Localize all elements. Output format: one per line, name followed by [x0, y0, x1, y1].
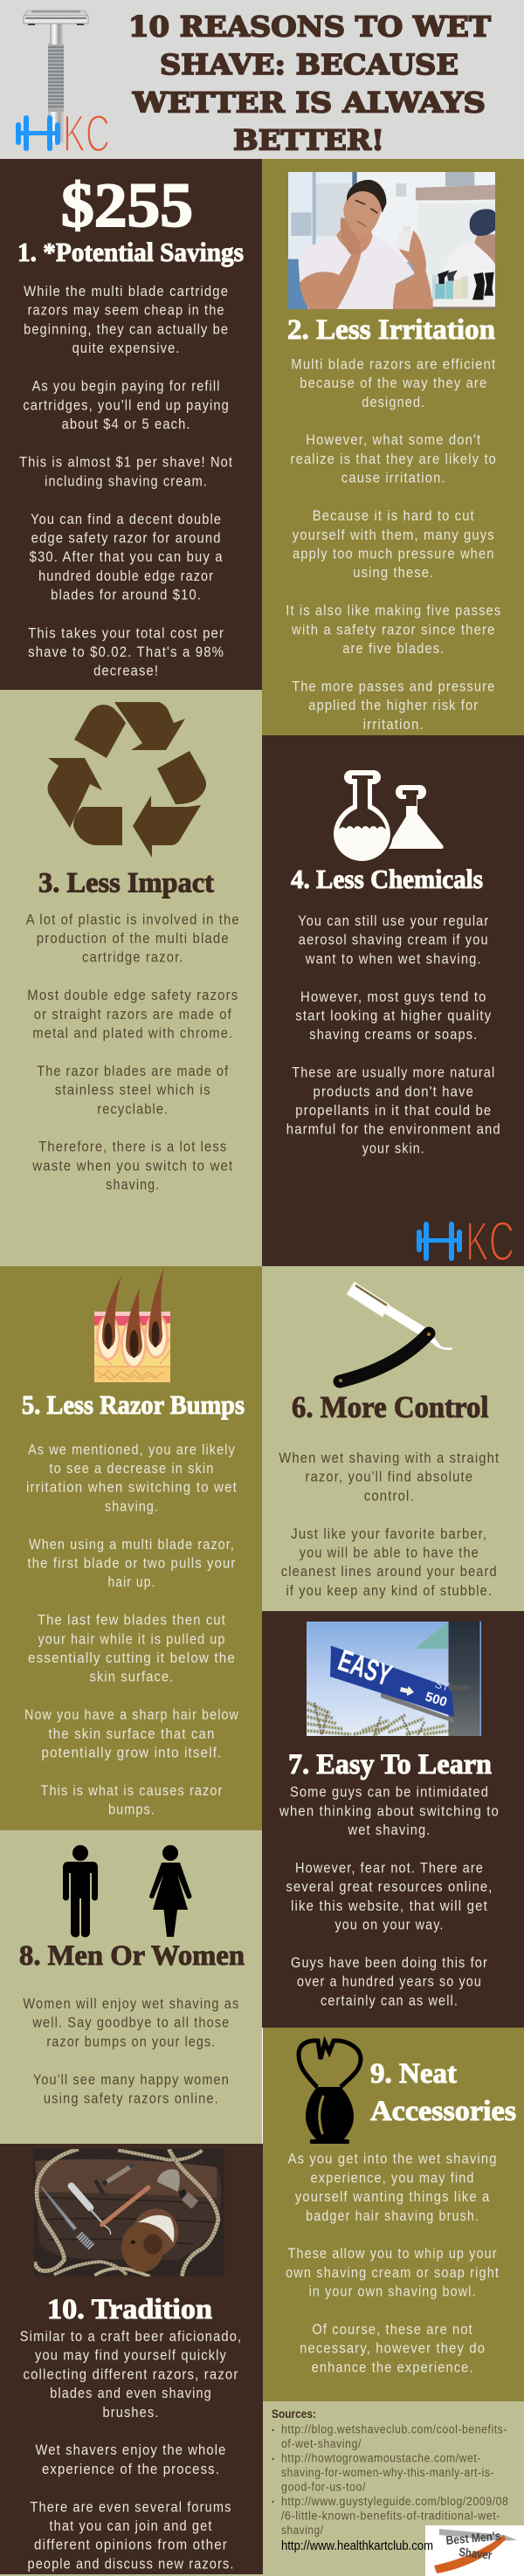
- big number: $255: $255: [61, 170, 193, 240]
- body text: control: When wet shaving with a straight: [279, 1450, 500, 1466]
- body text: tradition: that you can join and get: [49, 2517, 213, 2534]
- photo: shaving tools on wood: [34, 2149, 224, 2276]
- body text: tradition: brushes.: [103, 2404, 159, 2421]
- body text: easy: you on your way.: [335, 1917, 444, 1933]
- heading: 9: [370, 2058, 516, 2127]
- sources list: of-wet-shaving/: [281, 2437, 362, 2450]
- body text: razor bumps: essentially cutting it below the: [28, 1650, 236, 1666]
- title: 10 REASONS TO WET: [128, 10, 491, 44]
- body text: razor bumps: As we mentioned, you are likely: [28, 1441, 236, 1457]
- panel: 6 more control: [262, 1266, 524, 1611]
- body text: irritation: apply too much pressure when: [293, 545, 495, 562]
- icon: recycle symbol: [47, 702, 206, 858]
- body text: accessories: yourself wanting things like a: [295, 2188, 490, 2205]
- body text: chemicals: However, most guys tend to: [300, 988, 487, 1005]
- body text: irritation: Multi blade razors are efficient: [291, 355, 496, 372]
- body text: easy: Guys have been doing this for: [291, 1954, 488, 1971]
- body text: impact: recyclable.: [97, 1100, 169, 1117]
- body text: tradition: different opinions from other: [34, 2537, 228, 2553]
- body text: razor bumps: Now you have a sharp hair below: [24, 1706, 239, 1723]
- panel: 5 less razor bumps: [0, 1266, 262, 1830]
- body text: savings: As you begin paying for refill: [32, 378, 221, 395]
- body text: irritation: irritation.: [363, 716, 424, 733]
- body text: savings: While the multi blade cartridge: [24, 283, 229, 300]
- body text: accessories: enhance the experience.: [312, 2359, 474, 2375]
- icon: shaving brush: [299, 2041, 361, 2144]
- header panel: [0, 0, 524, 162]
- body text: impact: A lot of plastic is involved in the: [26, 911, 240, 927]
- heading: 9: Accessories: [370, 2096, 516, 2127]
- body text: irritation: However, what some don't: [306, 431, 481, 448]
- body text: easy: [279, 1784, 500, 2008]
- panel: 1 potential savings: [0, 159, 262, 690]
- panel: 4 less chemicals: [262, 735, 524, 1273]
- sources heading: Sources:: [272, 2407, 316, 2421]
- body text: chemicals: You can still use your regular: [298, 913, 489, 929]
- body text: accessories: Of course, these are not: [312, 2321, 473, 2338]
- photo: easy street sign: ST: [433, 1677, 451, 1694]
- badge: best men's shaver: Best Men's: [445, 2529, 501, 2547]
- title: [128, 10, 491, 157]
- body text: razor bumps: potentially grow into itself.: [42, 1745, 222, 1760]
- body text: women: using safety razors online.: [44, 2090, 219, 2106]
- photo: man with aftershave: [288, 172, 495, 310]
- body text: razor bumps: [24, 1441, 239, 1818]
- photo: easy street sign: [307, 1622, 481, 1736]
- body text: irritation: using these.: [353, 564, 434, 581]
- body text: tradition: blades and even shaving: [50, 2385, 212, 2401]
- panel: 9 neat accessories: [263, 2028, 524, 2401]
- body text: savings: including shaving cream.: [45, 472, 208, 489]
- body text: easy: certainly can as well.: [321, 1992, 458, 2008]
- sources list: shaving/: [281, 2524, 323, 2537]
- body text: savings: This takes your total cost per: [28, 624, 224, 641]
- body text: tradition: Similar to a craft beer aficionado,: [20, 2328, 242, 2345]
- website link: http://www.healthkartclub.com: [281, 2538, 433, 2553]
- icon: straight razor: [339, 1282, 452, 1382]
- body text: savings: You can find a decent double: [31, 511, 222, 527]
- body text: chemicals: These are usually more natural: [292, 1064, 495, 1081]
- body text: savings: about $4 or 5 each.: [62, 416, 191, 432]
- body text: control: you will be able to have the: [300, 1544, 479, 1561]
- sources list: good-for-us-too/: [281, 2481, 366, 2494]
- body text: savings: shave to $0.02. That's a 98%: [28, 644, 224, 660]
- panel: 2 less irritation: [262, 159, 524, 735]
- panel: 8 men or women: [0, 1830, 262, 2144]
- icon: safety razor: [24, 10, 88, 142]
- icon: flasks: [332, 770, 444, 864]
- photo: easy street sign: 500: [424, 1690, 449, 1710]
- body text: women: Women will enjoy wet shaving as: [23, 1995, 239, 2012]
- sources list: http://blog.wetshaveclub.com/cool-benefits-: [281, 2423, 507, 2436]
- body text: savings: hundred double edge razor: [38, 568, 214, 584]
- panel: 3 less impact: [0, 690, 262, 1266]
- body text: irritation: [286, 355, 501, 733]
- title: SHAVE: BECAUSE: [160, 48, 458, 81]
- body text: razor bumps: your hair while it is pulled up: [38, 1630, 225, 1647]
- body text: razor bumps: the first blade or two pulls your: [28, 1554, 236, 1572]
- body text: tradition: people and discuss new razors.: [28, 2555, 234, 2572]
- sources list: http://www.guystyleguide.com/blog/2009/08: [281, 2495, 508, 2508]
- body text: impact: [26, 911, 240, 1193]
- body text: irritation: applied the higher risk for: [308, 697, 479, 713]
- body text: razor bumps: skin surface.: [89, 1669, 175, 1685]
- panel: sources: [263, 2401, 524, 2576]
- body text: impact: The razor blades are made of: [37, 1063, 229, 1079]
- body text: razor bumps: shaving.: [105, 1498, 159, 1514]
- body text: razor bumps: irritation when switching to wet: [26, 1479, 238, 1496]
- body text: razor bumps: bumps.: [108, 1801, 155, 1818]
- body text: accessories: experience, you may find: [311, 2169, 475, 2186]
- sources list: http://howtogrowamoustache.com/wet-: [281, 2452, 481, 2465]
- body text: impact: cartridge razor.: [82, 949, 184, 966]
- body text: chemicals: shaving creams or soaps.: [309, 1026, 478, 1043]
- body text: control: Just like your favorite barber,: [291, 1526, 487, 1542]
- sources list: /6-little-known-benefits-of-traditional-wet-: [281, 2510, 500, 2523]
- logo: HKC: KC: [63, 105, 110, 162]
- body text: control: cleanest lines around your beard: [281, 1563, 498, 1580]
- body text: irritation: Because it is hard to cut: [313, 507, 475, 524]
- body text: tradition: collecting different razors, razor: [23, 2366, 239, 2382]
- body text: easy: when thinking about switching to: [279, 1802, 500, 1819]
- sources list: [272, 2423, 508, 2537]
- body text: chemicals: your skin.: [362, 1140, 425, 1156]
- logo: HKC: [16, 105, 110, 162]
- panel: 7 easy to learn: [262, 1611, 524, 2028]
- title: WETTER IS ALWAYS: [132, 86, 486, 119]
- body text: easy: over a hundred years so you: [297, 1973, 482, 1990]
- body text: impact: Most double edge safety razors: [27, 987, 238, 1003]
- body text: irritation: with a safety razor since there: [291, 621, 496, 637]
- body text: irritation: cause irritation.: [341, 470, 446, 486]
- body text: impact: stainless steel which is: [55, 1082, 211, 1099]
- icon: man: [63, 1845, 98, 1937]
- body text: easy: like this website, that will get: [291, 1898, 488, 1914]
- body text: irritation: yourself with them, many guys: [293, 527, 495, 543]
- body text: impact: or straight razors are made of: [34, 1006, 232, 1023]
- sources list: shaving-for-women-why-this-manly-art-is-: [281, 2466, 494, 2479]
- body text: impact: shaving.: [106, 1176, 160, 1193]
- heading: 10: 10. Tradition: [47, 2294, 212, 2325]
- heading: 6: 6. More Control: [292, 1390, 489, 1424]
- body text: accessories: [286, 2151, 500, 2375]
- body text: savings: This is almost $1 per shave! Not: [19, 454, 233, 471]
- body text: irritation: designed.: [362, 394, 425, 410]
- body text: savings: blades for around $10.: [51, 587, 202, 603]
- body text: women: [23, 1995, 239, 2106]
- body text: savings: cartridges, you'll end up paying: [23, 396, 230, 413]
- badge: best men's shaver: Shaver: [458, 2545, 493, 2562]
- badge: best men's shaver: [425, 2525, 524, 2576]
- body text: savings: edge safety razor for around: [31, 529, 222, 547]
- body text: chemicals: aerosol shaving cream if you: [299, 932, 489, 948]
- body text: razor bumps: This is what is causes razor: [40, 1782, 224, 1799]
- body text: control: razor, you'll find absolute: [306, 1469, 473, 1485]
- body text: impact: metal and plated with chrome.: [32, 1025, 233, 1041]
- heading: 9: 9. Neat: [370, 2058, 457, 2090]
- body text: control: control.: [364, 1487, 415, 1504]
- body text: tradition: Wet shavers enjoy the whole: [35, 2442, 227, 2458]
- body text: irritation: realize is that they are likely to: [291, 451, 497, 467]
- heading: 7: 7. Easy To Learn: [288, 1749, 492, 1780]
- body text: control: if you keep any kind of stubble.: [286, 1582, 493, 1599]
- photo: easy street sign: EASY: [334, 1643, 396, 1693]
- body text: easy: Some guys can be intimidated: [290, 1784, 489, 1801]
- body text: women: You'll see many happy women: [33, 2071, 230, 2088]
- logo: HKC: [417, 1210, 514, 1273]
- body text: impact: waste when you switch to wet: [31, 1157, 233, 1174]
- body text: easy: several great resources online,: [286, 1878, 493, 1895]
- body text: savings: beginning, they can actually be: [24, 321, 229, 337]
- body text: razor bumps: When using a multi blade razor,: [29, 1536, 235, 1553]
- heading: 8: 8. Men Or Women: [19, 1940, 245, 1972]
- body text: chemicals: products and don't have: [314, 1083, 474, 1099]
- heading: 5: 5. Less Razor Bumps: [22, 1389, 245, 1420]
- body text: chemicals: propellants in it that could be: [295, 1102, 492, 1119]
- body text: accessories: As you get into the wet shaving: [288, 2151, 498, 2167]
- body text: razor bumps: The last few blades then cut: [38, 1612, 226, 1629]
- body text: irritation: The more passes and pressure: [292, 678, 495, 695]
- heading: 3: 3. Less Impact: [38, 868, 214, 899]
- body text: easy: wet shaving.: [348, 1822, 431, 1838]
- body text: savings: $30. After that you can buy a: [30, 548, 224, 565]
- body text: control: [279, 1450, 500, 1599]
- body text: savings: [19, 283, 233, 679]
- icon: skin and hair follicles: [94, 1267, 170, 1382]
- body text: accessories: badger hair shaving brush.: [306, 2208, 479, 2224]
- body text: irritation: are five blades.: [342, 640, 445, 657]
- title: BETTER!: [233, 124, 384, 157]
- heading: 2: 2. Less Irritation: [287, 314, 495, 346]
- body text: chemicals: [286, 913, 501, 1156]
- body text: women: razor bumps on your legs.: [46, 2033, 216, 2049]
- body text: razor bumps: the skin surface that can: [49, 1725, 215, 1742]
- body text: irritation: because of the way they are: [300, 375, 487, 391]
- icon: woman: [149, 1845, 191, 1937]
- body text: savings: razors may seem cheap in the: [28, 302, 225, 319]
- bottom strip: [0, 2574, 263, 2576]
- body text: chemicals: start looking at higher quality: [295, 1008, 492, 1023]
- body text: savings: quite expensive.: [72, 340, 181, 356]
- body text: razor bumps: hair up.: [108, 1574, 155, 1590]
- body text: women: well. Say goodbye to all those: [32, 2015, 230, 2031]
- body text: impact: production of the multi blade: [37, 930, 230, 947]
- body text: easy: However, fear not. There are: [295, 1860, 484, 1876]
- body text: accessories: necessary, however they do: [300, 2340, 486, 2357]
- body text: chemicals: want to when wet shaving.: [305, 950, 482, 967]
- body text: razor bumps: to see a decrease in skin: [49, 1460, 215, 1477]
- body text: impact: Therefore, there is a lot less: [38, 1139, 227, 1155]
- heading: 4: 4. Less Chemicals: [291, 864, 483, 894]
- body text: savings: decrease!: [93, 663, 159, 679]
- body text: tradition: There are even several forums: [30, 2498, 232, 2515]
- body text: tradition: you may find yourself quickly: [35, 2347, 227, 2364]
- heading: 1: 1. *Potential Savings: [17, 237, 244, 267]
- panel: 10 tradition: [0, 2144, 263, 2574]
- body text: tradition: [20, 2328, 242, 2572]
- body text: chemicals: harmful for the environment and: [286, 1121, 501, 1138]
- body text: accessories: in your own shaving bowl.: [309, 2283, 477, 2300]
- body text: tradition: experience of the process.: [42, 2461, 220, 2477]
